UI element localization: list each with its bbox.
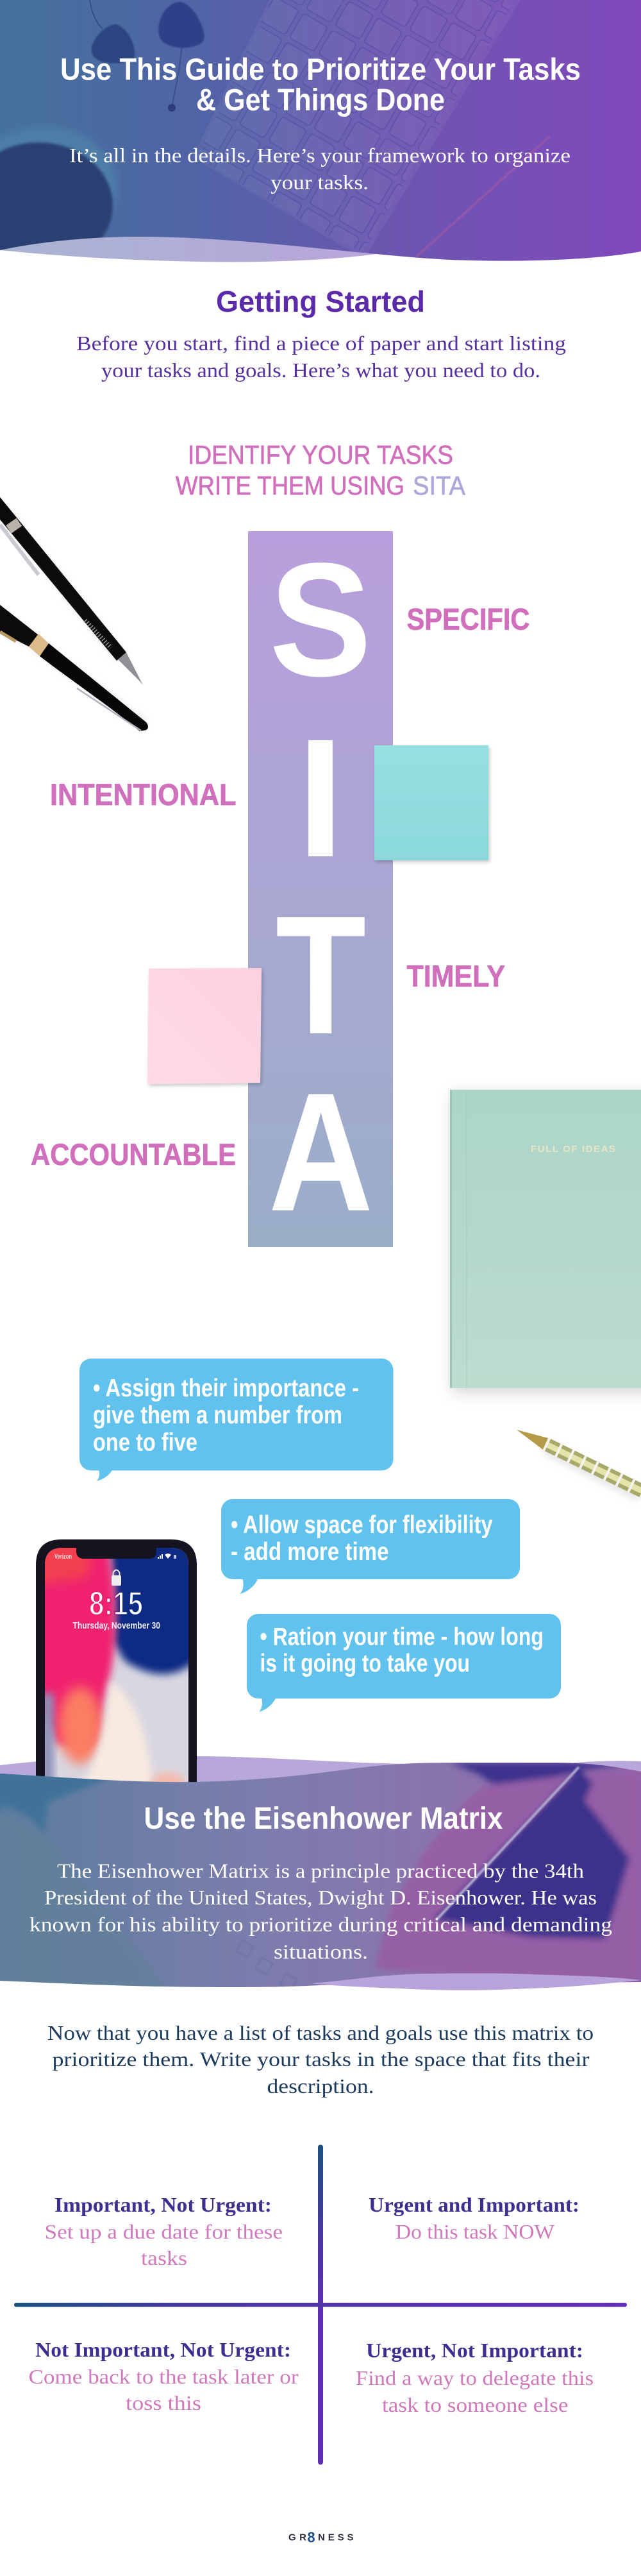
quadrant: not important, not urgent bbox=[28, 2338, 299, 2414]
quadrant: urgent, not important bbox=[356, 2339, 594, 2416]
quadrant: urgent, not important: Find a way to delegate this bbox=[356, 2366, 594, 2389]
quadrant: not important, not urgent: Come back to the task later or bbox=[28, 2365, 299, 2388]
smartphone bbox=[32, 1536, 199, 1796]
intro text: your tasks and goals. Here’s what you need to do. bbox=[101, 359, 540, 382]
speech bubble: ration time: • Ration your time - how long bbox=[260, 1623, 544, 1651]
quadrant: urgent, not important: task to someone else bbox=[382, 2393, 568, 2416]
pen two bbox=[0, 605, 148, 731]
icon: lock bbox=[112, 1570, 121, 1586]
photo: hand bbox=[375, 1770, 641, 1988]
eisenhower description: situations. bbox=[274, 1940, 368, 1963]
label: accountable: ACCOUNTABLE bbox=[31, 1137, 236, 1171]
heading: identify your tasks bbox=[176, 440, 466, 500]
letter A: A bbox=[269, 1058, 373, 1246]
speech bubble: assign importance bbox=[79, 1359, 394, 1481]
matrix instructions: prioritize them. Write your tasks in the space that fits their bbox=[53, 2047, 590, 2071]
notebook bbox=[450, 1090, 641, 1388]
sticky note: teal bbox=[374, 745, 488, 860]
quadrant: urgent and important: Do this task NOW bbox=[395, 2220, 555, 2243]
phone date: Thursday, November 30 bbox=[73, 1620, 160, 1631]
matrix instructions bbox=[47, 2021, 594, 2097]
notebook title: FULL OF IDEAS bbox=[531, 1144, 615, 1155]
title: & Get Things Done bbox=[196, 83, 445, 117]
icon: status signal bbox=[158, 1554, 176, 1559]
eisenhower description: President of the United States, Dwight D. Eisenhower. He was bbox=[44, 1886, 597, 1909]
intro text: Before you start, find a piece of paper and start listing bbox=[76, 332, 566, 355]
matrix instructions: description. bbox=[267, 2074, 374, 2097]
phone screen bbox=[45, 1548, 188, 1782]
pen one bbox=[0, 497, 143, 685]
quadrant: important, not urgent: Important, Not Urgent: bbox=[54, 2193, 272, 2216]
quadrant: not important, not urgent: Not Important, Not Urgent: bbox=[35, 2338, 291, 2361]
label: timely: TIMELY bbox=[406, 959, 505, 993]
photo: dark sleeve bbox=[449, 1763, 641, 1784]
quadrant: not important, not urgent: toss this bbox=[126, 2391, 201, 2414]
intro text bbox=[76, 332, 566, 382]
label: intentional: INTENTIONAL bbox=[50, 777, 236, 811]
photo: keyboard bbox=[197, 0, 515, 251]
subtitle: It’s all in the details. Here’s your framework to organize bbox=[69, 144, 570, 167]
speech bubble: assign importance: give them a number from bbox=[93, 1402, 342, 1429]
phone carrier: Verizon bbox=[54, 1553, 72, 1561]
sticky note: pink bbox=[147, 968, 262, 1084]
phone notch bbox=[76, 1547, 156, 1559]
quadrant: important, not urgent: Set up a due date for these bbox=[45, 2220, 283, 2243]
photo: notebook edge bbox=[0, 1774, 110, 1832]
speech bubble: flexibility: - add more time bbox=[231, 1538, 388, 1566]
quadrant: urgent, not important: Urgent, Not Important: bbox=[366, 2339, 583, 2362]
letter S: S bbox=[269, 530, 372, 710]
subtitle bbox=[69, 144, 570, 194]
title: Use This Guide to Prioritize Your Tasks bbox=[60, 53, 581, 87]
heading: use the eisenhower matrix: Use the Eisenhower Matrix bbox=[144, 1802, 503, 1836]
letter T: T bbox=[276, 881, 366, 1069]
wave: lavender overlay bbox=[0, 237, 376, 262]
quadrant: urgent and important bbox=[369, 2193, 579, 2243]
speech bubble: assign importance: one to five bbox=[93, 1429, 197, 1456]
speech bubble: ration time bbox=[247, 1614, 561, 1712]
speech bubble: ration time: is it going to take you bbox=[260, 1650, 470, 1677]
pencil bbox=[517, 1430, 641, 1495]
letter I: I bbox=[297, 704, 344, 892]
wave: lavender behind matrix band bbox=[0, 1756, 641, 1796]
logo: gr8ness bbox=[288, 2529, 354, 2545]
quadrant: important, not urgent: tasks bbox=[141, 2246, 187, 2269]
photo: checklist boxes bbox=[236, 1940, 297, 1991]
logo: gr8ness: GR bbox=[288, 2532, 306, 2543]
quadrant: important, not urgent bbox=[45, 2193, 283, 2269]
label: specific: SPECIFIC bbox=[406, 602, 529, 636]
photo: pen bbox=[417, 136, 550, 257]
photo: coffee cup bbox=[0, 127, 118, 250]
heading: identify your tasks: IDENTIFY YOUR TASKS bbox=[188, 440, 453, 470]
hero banner with wave and background photo bbox=[0, 0, 641, 268]
heading: identify your tasks: SITA bbox=[413, 471, 466, 500]
image: black pens bbox=[0, 497, 148, 731]
heading: getting started: Getting Started bbox=[216, 285, 425, 318]
photo: earbuds bbox=[90, 0, 204, 112]
eisenhower description: The Eisenhower Matrix is a principle practiced by the 34th bbox=[57, 1859, 584, 1882]
title bbox=[60, 53, 581, 117]
quadrant: urgent and important: Urgent and Important: bbox=[369, 2193, 579, 2216]
matrix instructions: Now that you have a list of tasks and goals use this matrix to bbox=[47, 2021, 594, 2044]
logo: gr8ness: 8 bbox=[308, 2529, 315, 2545]
photo: pen shaft bbox=[436, 1767, 579, 1920]
heading: identify your tasks: WRITE THEM USING bbox=[176, 471, 404, 500]
speech bubble: flexibility bbox=[221, 1499, 520, 1594]
eisenhower description: known for his ability to prioritize during critical and demanding bbox=[29, 1913, 612, 1936]
speech bubble: flexibility: • Allow space for flexibility bbox=[231, 1511, 493, 1539]
phone clock: 8:15 bbox=[89, 1586, 143, 1623]
matrix band with background photo bbox=[0, 1758, 641, 1992]
eisenhower description bbox=[29, 1859, 612, 1963]
wave: lavender bottom bbox=[311, 1973, 641, 1990]
speech bubble: assign importance: • Assign their importance - bbox=[93, 1375, 359, 1402]
SITA column bbox=[248, 530, 393, 1247]
matrix axes bbox=[14, 2145, 627, 2464]
subtitle: your tasks. bbox=[271, 171, 369, 194]
logo: gr8ness: NESS bbox=[318, 2532, 354, 2543]
